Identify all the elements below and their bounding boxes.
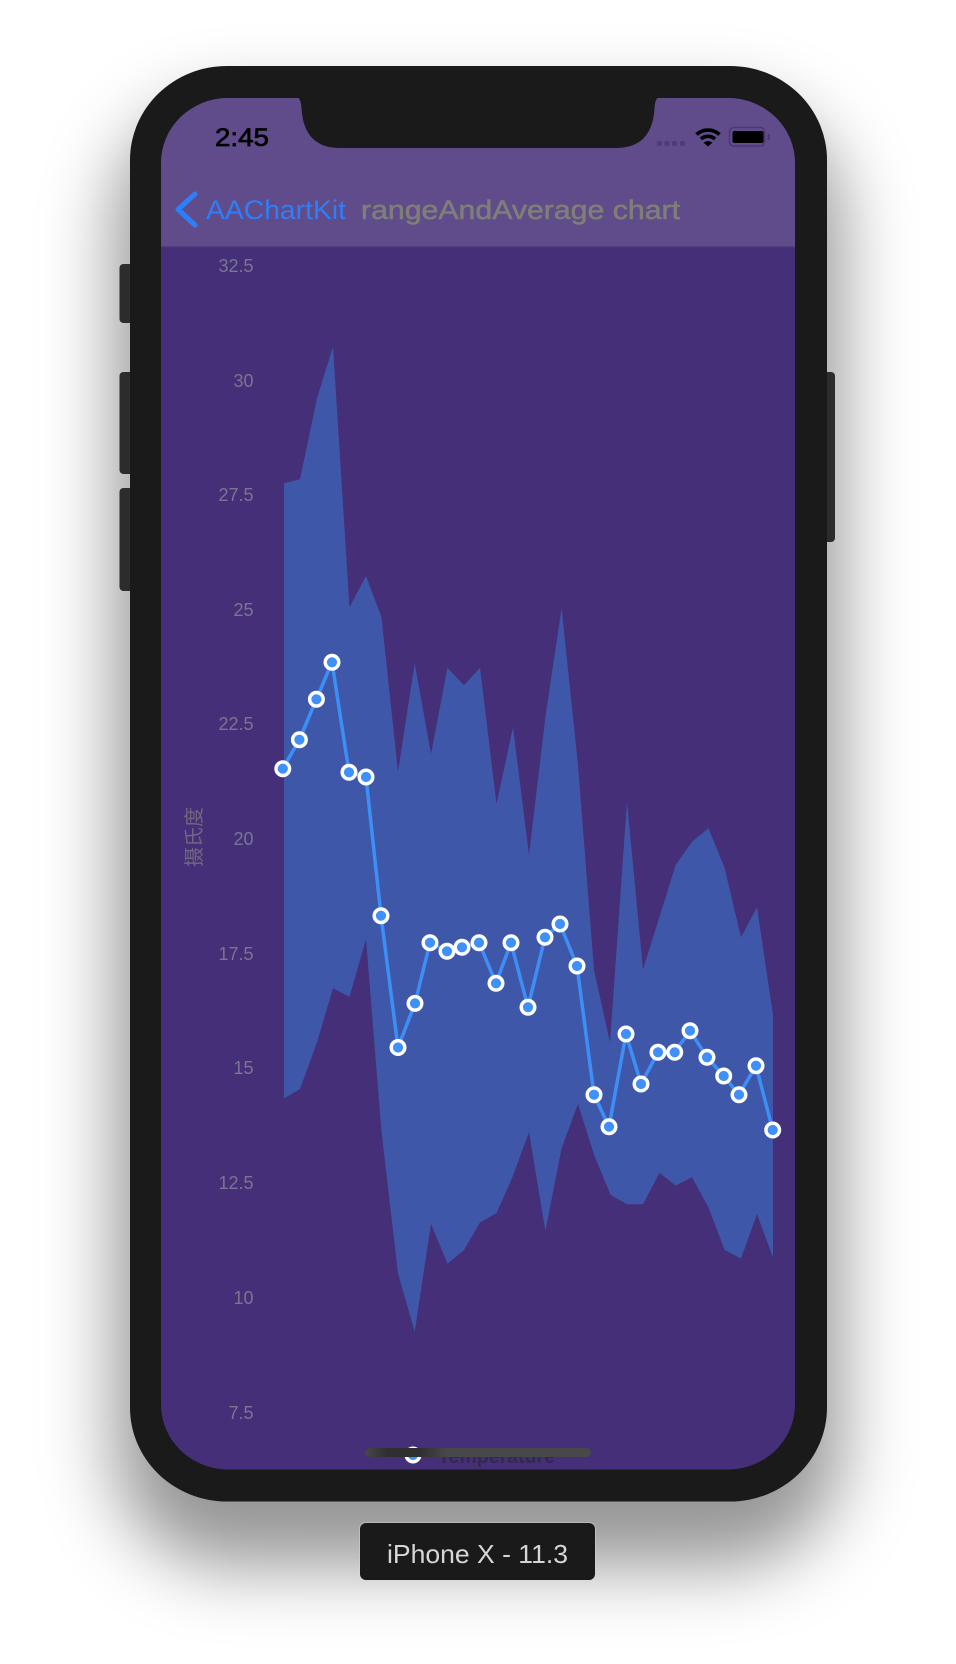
range band: [284, 347, 773, 1332]
y axis labels: 20: [233, 829, 254, 849]
average line: [283, 662, 773, 1130]
y axis labels: 15: [233, 1058, 254, 1078]
signal dots: [657, 141, 685, 146]
data point markers: [276, 656, 780, 1137]
y axis title: 摄氏度: [183, 807, 206, 867]
phone screen: [161, 98, 795, 1470]
side buttons: [120, 264, 835, 591]
y axis labels: 10: [233, 1288, 254, 1308]
legend: Temperature: [438, 1446, 555, 1468]
y axis labels: 17.5: [218, 944, 254, 964]
phone drop shadow: [115, 105, 841, 1566]
y axis labels: 32.5: [218, 256, 254, 276]
y axis labels: 25: [233, 600, 254, 620]
navigation bar: [161, 98, 795, 247]
home indicator: [365, 1448, 591, 1457]
device label: [359, 1522, 596, 1581]
y axis labels: 22.5: [218, 714, 254, 734]
nav title: rangeAndAverage chart: [361, 195, 681, 225]
y axis labels: 27.5: [218, 485, 254, 505]
status bar time: 2:45: [215, 124, 269, 152]
notch: [295, 96, 661, 148]
icon: wifi: [696, 130, 720, 146]
phone body: [130, 66, 827, 1502]
y axis labels: 30: [233, 371, 254, 391]
y axis labels: [218, 256, 254, 1423]
back button: AAChartKit: [206, 195, 347, 225]
y axis labels: 12.5: [218, 1173, 254, 1193]
chart background: [161, 98, 795, 1470]
device label: iPhone X - 11.3: [387, 1539, 568, 1569]
icon: battery: [730, 128, 770, 146]
y axis labels: 7.5: [228, 1403, 254, 1423]
